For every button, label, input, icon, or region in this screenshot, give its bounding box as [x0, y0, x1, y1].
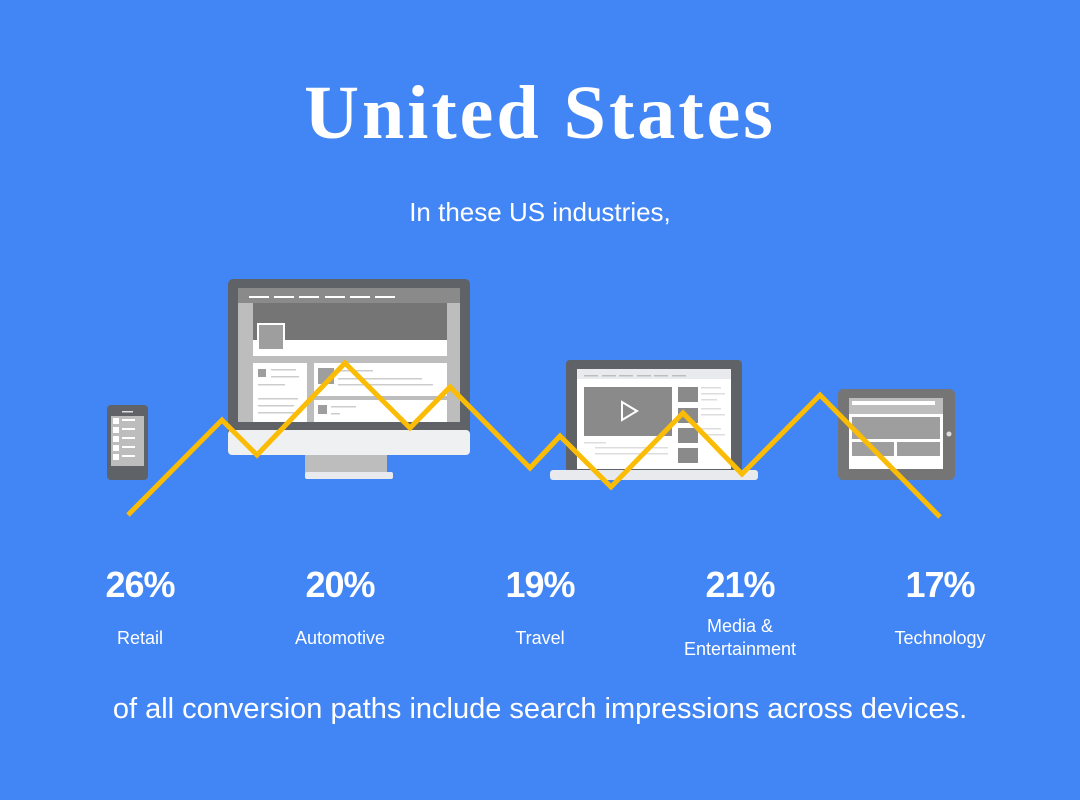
title: United States	[304, 71, 776, 155]
yellow trend line	[128, 363, 940, 517]
stat: technology	[894, 564, 986, 648]
stat: media: 21%	[705, 564, 775, 605]
stat: automotive: 20%	[305, 564, 375, 605]
stat: retail	[105, 564, 175, 648]
stat: travel: Travel	[515, 628, 565, 648]
stat: media: Entertainment	[684, 639, 796, 659]
icon: laptop	[550, 360, 758, 480]
stat: retail: Retail	[117, 628, 163, 648]
stat: media	[684, 564, 796, 659]
stat: travel: 19%	[505, 564, 575, 605]
icon: phone	[107, 405, 148, 480]
icon: desktop monitor	[228, 279, 470, 479]
stat: media: Media &	[707, 616, 773, 636]
stat: technology: Technology	[894, 628, 986, 648]
subtitle: In these US industries,	[409, 197, 671, 227]
stat: automotive	[295, 564, 385, 648]
stat: retail: 26%	[105, 564, 175, 605]
footer text: of all conversion paths include search impressions across devices.	[113, 693, 967, 725]
icon: tablet	[838, 389, 955, 480]
stat: automotive: Automotive	[295, 628, 385, 648]
stat: technology: 17%	[905, 564, 975, 605]
stat: travel	[505, 564, 575, 648]
